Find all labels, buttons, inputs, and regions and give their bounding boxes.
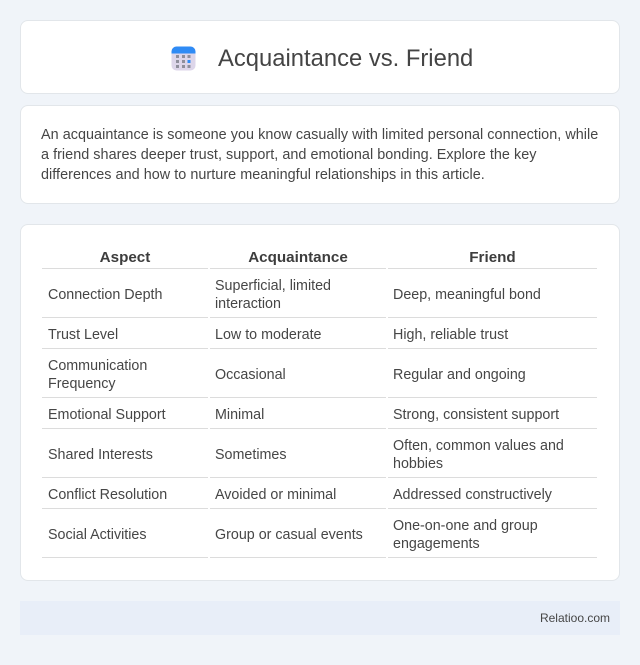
panel: introduction (20, 105, 620, 204)
table header (100, 249, 516, 266)
row: Shared Interests (48, 438, 564, 472)
row: Communication Frequency: Occasional (215, 367, 286, 383)
row: Communication Frequency (48, 358, 526, 392)
row: Conflict Resolution: Avoided or minimal (215, 487, 336, 503)
title: Acquaintance vs. Friend (218, 45, 473, 72)
row: Connection Depth: Superficial, limited (215, 278, 331, 294)
row: Connection Depth: Deep, meaningful bond (393, 287, 541, 303)
row: Communication Frequency: Communication (48, 358, 147, 374)
row: Emotional Support (48, 407, 559, 423)
row: Social Activities (48, 518, 538, 552)
row: Trust Level (48, 327, 508, 343)
icon: calendar (172, 46, 196, 70)
footer text: Relatioo.com (540, 611, 610, 625)
row: Social Activities: engagements (393, 536, 480, 552)
row: Communication Frequency: Regular and ongoing (393, 367, 526, 383)
row: Shared Interests: Often, common values and (393, 438, 564, 454)
row: Emotional Support: Minimal (215, 407, 264, 423)
row: Connection Depth: Connection Depth (48, 287, 162, 303)
row: Social Activities: One-on-one and group (393, 518, 538, 534)
text block: introduction: a friend shares deeper trust, support, and emotional bonding. Explore the key (41, 147, 536, 163)
row: Emotional Support: Strong, consistent support (393, 407, 559, 423)
row: Conflict Resolution: Conflict Resolution (48, 487, 167, 503)
row: Shared Interests: hobbies (393, 456, 443, 472)
table header: Aspect (100, 249, 150, 266)
row: Trust Level: Low to moderate (215, 327, 322, 343)
text block: introduction (41, 127, 598, 183)
footer bar (20, 601, 620, 635)
row: Communication Frequency: Frequency (48, 376, 116, 392)
row: Emotional Support: Emotional Support (48, 407, 166, 423)
row: Social Activities: Social Activities (48, 527, 147, 543)
panel: title card (20, 20, 620, 94)
row: Trust Level: Trust Level (48, 327, 118, 343)
panel: comparison table (20, 224, 620, 581)
row: Conflict Resolution: Addressed constructively (393, 487, 552, 503)
row: Social Activities: Group or casual events (215, 527, 363, 543)
row: Trust Level: High, reliable trust (393, 327, 508, 343)
row: Shared Interests: Shared Interests (48, 447, 153, 463)
row: Connection Depth: interaction (215, 296, 281, 312)
row: Connection Depth (48, 278, 541, 312)
text block: introduction: An acquaintance is someone you know casually with limited personal connection, while (41, 127, 598, 143)
table header: Acquaintance (248, 249, 348, 266)
table header: Friend (469, 249, 516, 266)
row: Conflict Resolution (48, 487, 552, 503)
text block: introduction: differences and how to nurture meaningful relationships in this article. (41, 167, 485, 183)
row: Shared Interests: Sometimes (215, 447, 287, 463)
